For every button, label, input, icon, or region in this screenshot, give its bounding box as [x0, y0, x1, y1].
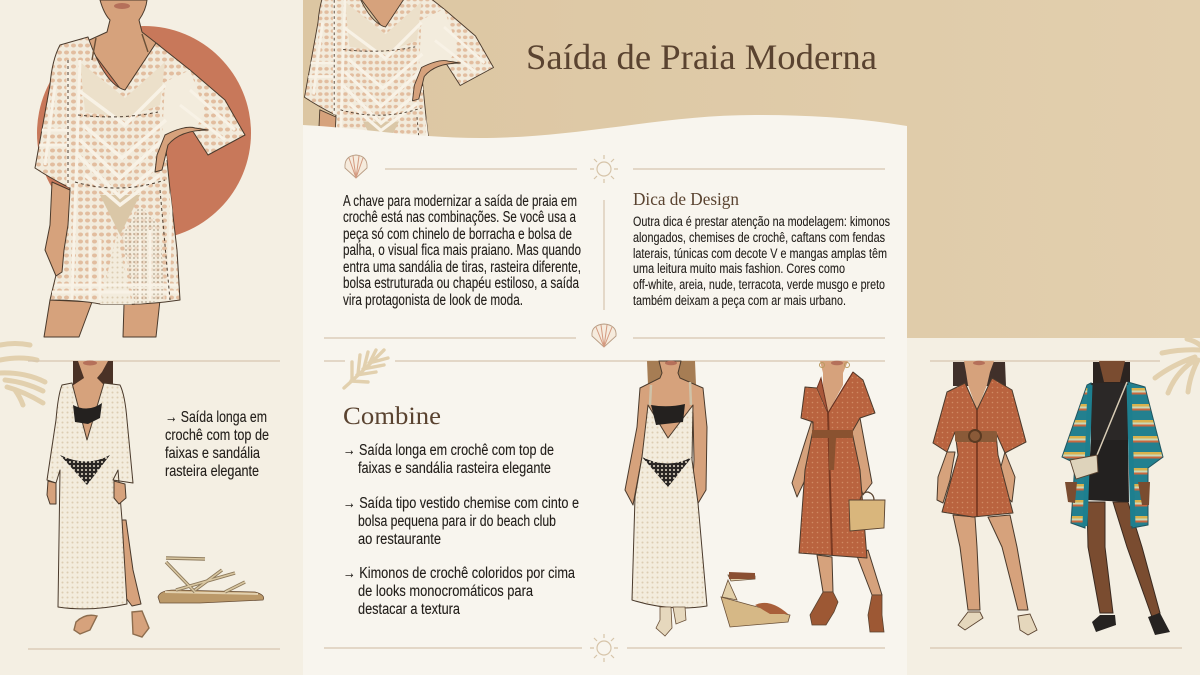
- text block: design tip: off-white, areia, nude, terracota, verde musgo e preto: [633, 277, 885, 293]
- list: combinations: destacar a textura: [358, 601, 460, 618]
- text block: design tip: [633, 214, 890, 309]
- title: Saída de Praia Moderna: [526, 37, 877, 77]
- caption: left panel: [165, 409, 269, 480]
- figure: slip crochet dress: [625, 361, 707, 636]
- list: combinations: ao restaurante: [358, 531, 441, 548]
- caption: left panel: rasteira elegante: [165, 463, 259, 480]
- list: combinations: → Kimonos de crochê coloridos por cima: [343, 565, 575, 582]
- list: combinations: [343, 442, 579, 618]
- figure: short terracotta dress: [933, 361, 1037, 635]
- caption: left panel: → Saída longa em: [165, 409, 267, 426]
- icon: shell middle: [592, 324, 616, 347]
- text block: intro: peça só com chinelo de borracha e bolsa de: [343, 226, 572, 243]
- caption: left panel: crochê com top de: [165, 427, 269, 444]
- icon: shell top: [345, 155, 367, 178]
- text block: intro: crochê está nas combinações. Se você usa a: [343, 209, 576, 226]
- palm leaf: centre: [344, 350, 388, 388]
- figure: terracotta chemise dress with belt and bag: [792, 361, 885, 632]
- text block: intro: vira protagonista de look de moda.: [343, 292, 523, 309]
- list: combinations: → Saída tipo vestido chemise com cinto e: [343, 495, 579, 512]
- text block: design tip: laterais, túnicas com decote V e mangas amplas têm: [633, 246, 887, 262]
- text block: intro: palha, o visual fica mais praiano. Mas quando: [343, 242, 581, 259]
- heading: combine: Combine: [343, 403, 441, 430]
- list: combinations: de looks monocromáticos para: [358, 583, 533, 600]
- text block: design tip: também deixam a peça com ar mais urbano.: [633, 293, 846, 309]
- palm leaf: left: [0, 344, 45, 405]
- text block: design tip: Outra dica é prestar atenção na modelagem: kimonos: [633, 214, 890, 230]
- panel: central cream sheet: [303, 115, 907, 675]
- list: combinations: faixas e sandália rasteira elegante: [358, 460, 551, 477]
- text block: intro: bolsa estruturada ou chapéu estiloso, a saída: [343, 275, 579, 292]
- list: combinations: → Saída longa em crochê com top de: [343, 442, 554, 459]
- figure: long crochet dress: [47, 360, 149, 637]
- text block: intro: A chave para modernizar a saída de praia em: [343, 193, 577, 210]
- tunic figure cropped in top band: [304, 0, 494, 136]
- text block: intro: [343, 193, 581, 309]
- text block: design tip: uma leitura muito mais fashion. Cores como: [633, 261, 845, 277]
- list: combinations: bolsa pequena para ir do beach club: [358, 513, 556, 530]
- heading: design tip: Dica de Design: [633, 189, 739, 209]
- icon: sun bottom: [590, 634, 618, 662]
- icon: sun top: [590, 155, 618, 183]
- tunic figure: [35, 0, 245, 337]
- text block: intro: entra uma sandália de tiras, rasteira diferente,: [343, 259, 581, 276]
- palm leaf: right: [1155, 339, 1200, 393]
- panel: top tan band: [303, 0, 1200, 338]
- icon: espadrille wedge: [721, 572, 790, 627]
- main illustration: crochet tunic with sun circle: [35, 0, 251, 337]
- icon: flat strappy sandal: [158, 558, 264, 603]
- divider lines: [28, 169, 1182, 649]
- text block: design tip: alongados, chemises de crochê, caftans com fendas: [633, 230, 885, 246]
- caption: left panel: faixas e sandália: [165, 445, 260, 462]
- sun circle: [37, 26, 251, 240]
- figure: colourful kimono over black look: [1062, 361, 1170, 635]
